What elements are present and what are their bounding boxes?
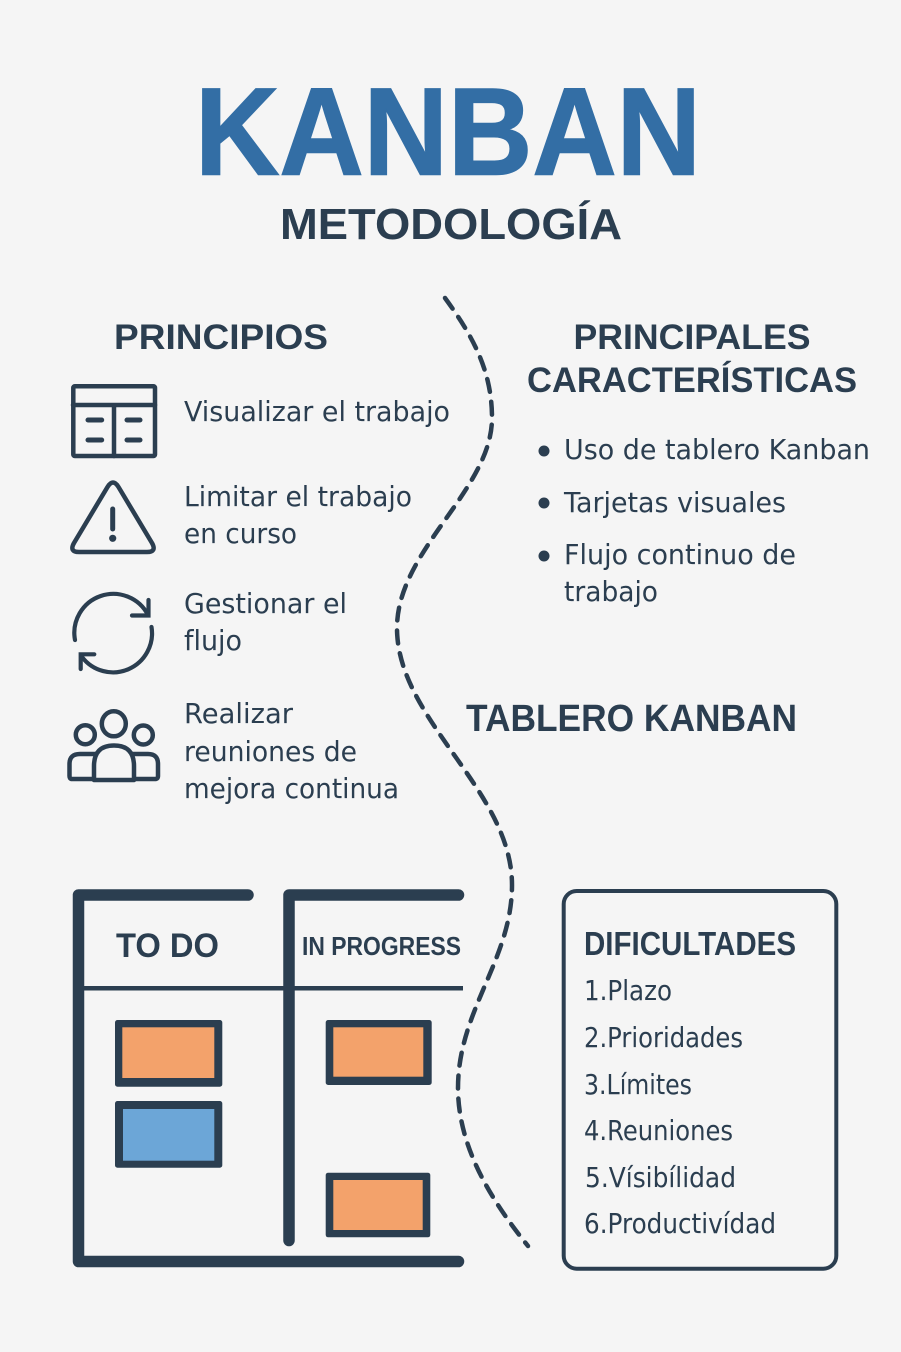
heading: principales: PRINCIPALES [574,318,810,357]
text: flujo: flujo [184,624,242,657]
text: visualizar: Visualizar el trabajo [184,395,450,428]
bullet list: trabajo [564,575,658,608]
text: limitar: Limitar el trabajo [184,480,412,513]
panel: dificultades [564,891,836,1269]
icon: board [73,386,155,456]
text: realizar: Realizar [184,697,293,730]
list: dificultades: 4.Reuniones [584,1114,733,1147]
text: mejora: mejora continua [184,772,399,805]
chart: kanban board [78,895,463,1262]
icon: team [70,711,158,780]
subtitle: METODOLOGÍA [280,199,622,249]
card: orange 3 [326,1173,430,1237]
list: dificultades: 5.Vísibílidad [585,1161,736,1194]
panel border [564,891,836,1269]
icon: cycle [74,594,152,672]
board frame [78,895,458,1262]
list: dificultades: 2.Prioridades [584,1021,743,1054]
list: dificultades: 1.Plazo [584,974,672,1007]
text: reuniones: reuniones de [184,735,357,768]
column: to do: TO DO [116,927,219,965]
column: in progress: IN PROGRESS [302,931,461,961]
icon: warning [72,482,154,552]
card: orange 1 [115,1020,222,1087]
list: dificultades: 3.Límites [584,1068,692,1101]
card: orange 2 [326,1020,432,1085]
panel: principios [70,318,450,805]
title: KANBAN [195,64,701,202]
heading: principios: PRINCIPIOS [114,318,328,357]
bullet list: Uso de tablero Kanban [564,433,870,466]
heading: dificultades: DIFICULTADES [584,925,796,962]
text: en curso: en curso [184,517,297,550]
bullet list: Tarjetas visuales [563,486,786,519]
heading: tablero kanban: TABLERO KANBAN [466,698,797,740]
list: dificultades [584,974,776,1240]
bullet list: Flujo continuo de [564,538,796,571]
heading: caracteristicas: CARACTERÍSTICAS [527,360,857,400]
header divider [84,986,463,991]
list: dificultades: 6.Productivídad [584,1207,776,1240]
card: blue [115,1101,222,1168]
panel: principales caracteristicas [527,318,870,608]
bullet list [538,433,870,608]
dashed divider curve [397,298,528,1246]
text: gestionar: Gestionar el [184,587,347,620]
